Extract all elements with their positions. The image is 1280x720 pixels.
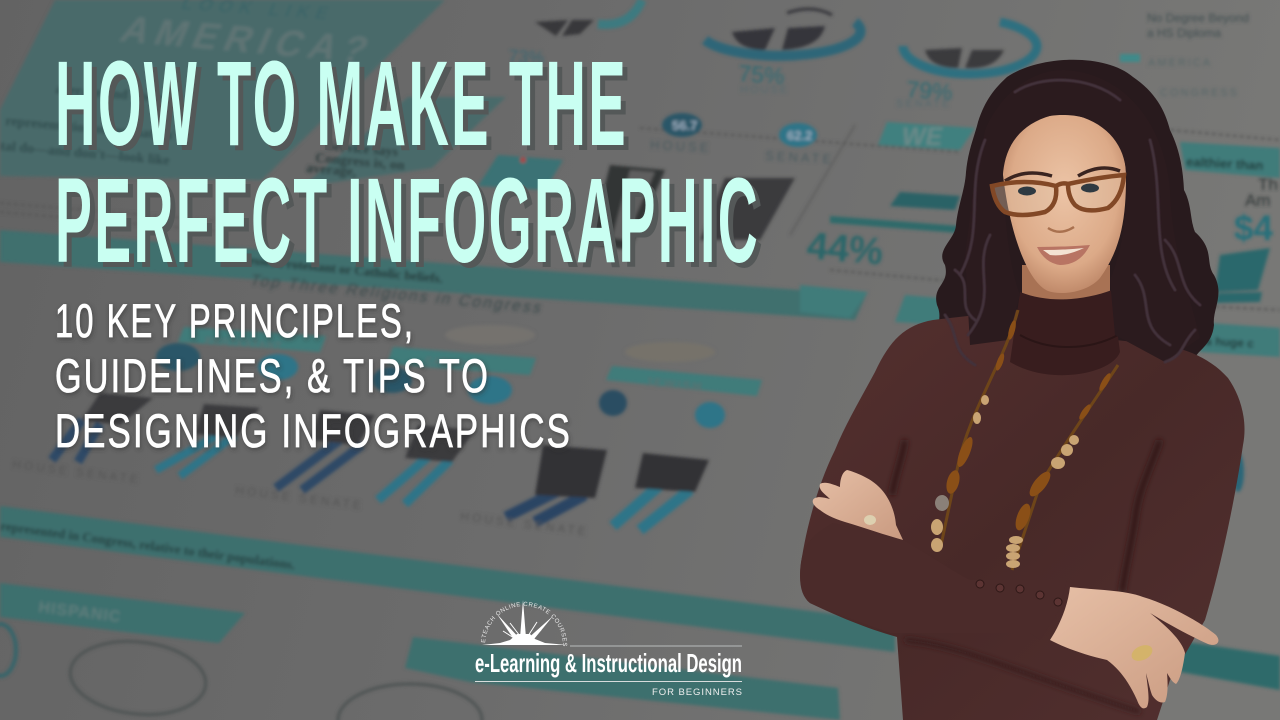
panel: look like america: average and diverse	[55, 82, 174, 107]
subtitle: GUIDELINES, & TIPS TO	[55, 349, 490, 402]
weathlier strip and 44 percent	[790, 122, 975, 325]
lower bands: represented in Congress, relative to their populations.	[0, 518, 296, 572]
subtitle: 10 KEY PRINCIPLES,	[55, 294, 415, 347]
band: religions: professes Protestant or Catholic beliefs.	[225, 250, 444, 286]
gauge icons: 75%	[738, 60, 785, 89]
logo: compass icon: ETEACH ONLINE CREATE COURSES	[481, 602, 568, 646]
woman: hair curls	[945, 80, 1200, 365]
isometric stacks	[478, 155, 795, 250]
age badges: 62.2	[787, 128, 812, 143]
gauge icons	[508, 0, 1037, 110]
title text: HOW TO MAKE THE	[55, 35, 628, 171]
right side panel fragments: Th	[1258, 175, 1278, 194]
right side panel fragments: No Degree Beyond	[1147, 11, 1249, 25]
woman: sleeve buttons	[976, 580, 1062, 606]
panel: congress age	[302, 97, 506, 187]
woman: right hand ring	[864, 515, 876, 525]
right side panel fragments: Am	[1245, 191, 1270, 210]
woman portrait	[800, 60, 1245, 720]
woman: face	[1003, 115, 1126, 293]
lower bands	[0, 506, 1280, 720]
woman: glasses	[992, 175, 1124, 215]
woman: necklace	[931, 310, 1118, 570]
woman: arm creases	[892, 440, 1160, 592]
panel: look like america: tal do—and don't—look like	[0, 139, 170, 169]
logo: tagline: FOR BEGINNERS	[652, 687, 742, 698]
panel: look like america: AMERICA?	[114, 10, 381, 71]
gauge icons: HOUSE	[740, 84, 789, 96]
right side panel fragments: $4	[1234, 209, 1273, 248]
title	[55, 35, 765, 293]
woman: eyebrows	[1005, 168, 1120, 181]
right side panel fragments: AMERICA	[1148, 57, 1212, 69]
title text	[55, 35, 760, 288]
woman: her left hand	[1050, 587, 1218, 708]
subtitle	[55, 294, 572, 457]
title shadow	[60, 40, 765, 293]
woman: eyes	[1018, 184, 1099, 196]
religion labels: PROTESTANT	[205, 336, 282, 352]
gauge icons: SENATE	[896, 98, 951, 110]
woman: hair front	[965, 70, 1200, 362]
background: blurred infographic sheet: HOUSE SENATE	[12, 457, 142, 487]
figures row	[52, 393, 709, 530]
subtitle: DESIGNING INFOGRAPHICS	[55, 404, 572, 457]
logo: name: e-Learning & Instructional Design	[475, 648, 742, 678]
panel: look like america	[0, 0, 445, 180]
age badges: SENATE	[765, 148, 835, 167]
weathlier strip and 44 percent: 44%	[805, 225, 885, 274]
weathlier strip and 44 percent: WE	[902, 123, 944, 151]
right side panel fragments: CONGRESS	[1160, 87, 1239, 99]
woman: her right hand	[813, 470, 903, 540]
woman: neck	[1022, 265, 1110, 310]
lower bands: HISPANIC	[38, 599, 122, 626]
panel: congress age: Service says	[326, 139, 399, 160]
dashed rules	[0, 128, 960, 282]
band: religions: Top Three Religions in Congress	[248, 272, 546, 317]
background: blurred infographic sheet: HOUSE SENATE	[460, 509, 590, 539]
woman: turtleneck	[1010, 290, 1120, 375]
panel: congress age: Congress is, on	[315, 151, 405, 174]
age badges: HOUSE	[650, 137, 712, 155]
logo: bottom rule	[475, 681, 742, 682]
panel: congress age: average,	[306, 161, 357, 180]
right side panel fragments: a huge c	[1205, 334, 1255, 351]
woman: mouth	[1037, 245, 1090, 265]
logo	[475, 600, 742, 698]
age badges: 56.7	[672, 118, 697, 133]
woman: hair back	[936, 60, 1218, 378]
right side panel fragments	[1120, 11, 1280, 492]
religion labels	[156, 325, 762, 428]
gauge icons: 79%	[906, 76, 953, 105]
right side panel fragments: ealthier than	[1186, 154, 1264, 173]
title shadow: HOW TO MAKE THE	[60, 40, 633, 176]
religion labels: CATHOLIC	[425, 356, 484, 371]
age badges	[650, 113, 835, 167]
woman: lower forearm crease	[905, 640, 1140, 712]
woman: sweater body	[800, 310, 1245, 720]
woman: forearm sleeve	[800, 523, 1067, 640]
logo: top rule	[570, 646, 742, 647]
woman: turtleneck ribs	[1020, 335, 1118, 347]
right side panel fragments: a HS Diploma	[1147, 26, 1221, 40]
woman: gold ring	[1129, 642, 1155, 664]
gauge icons: 73%	[508, 46, 545, 68]
background: blurred infographic sheet: HOUSE SENATE	[235, 483, 365, 513]
panel: look like america: representation of our nation's	[5, 114, 183, 144]
band: religions	[0, 230, 866, 320]
woman: nose	[1048, 227, 1074, 232]
religion labels: JEWISH	[645, 375, 704, 394]
